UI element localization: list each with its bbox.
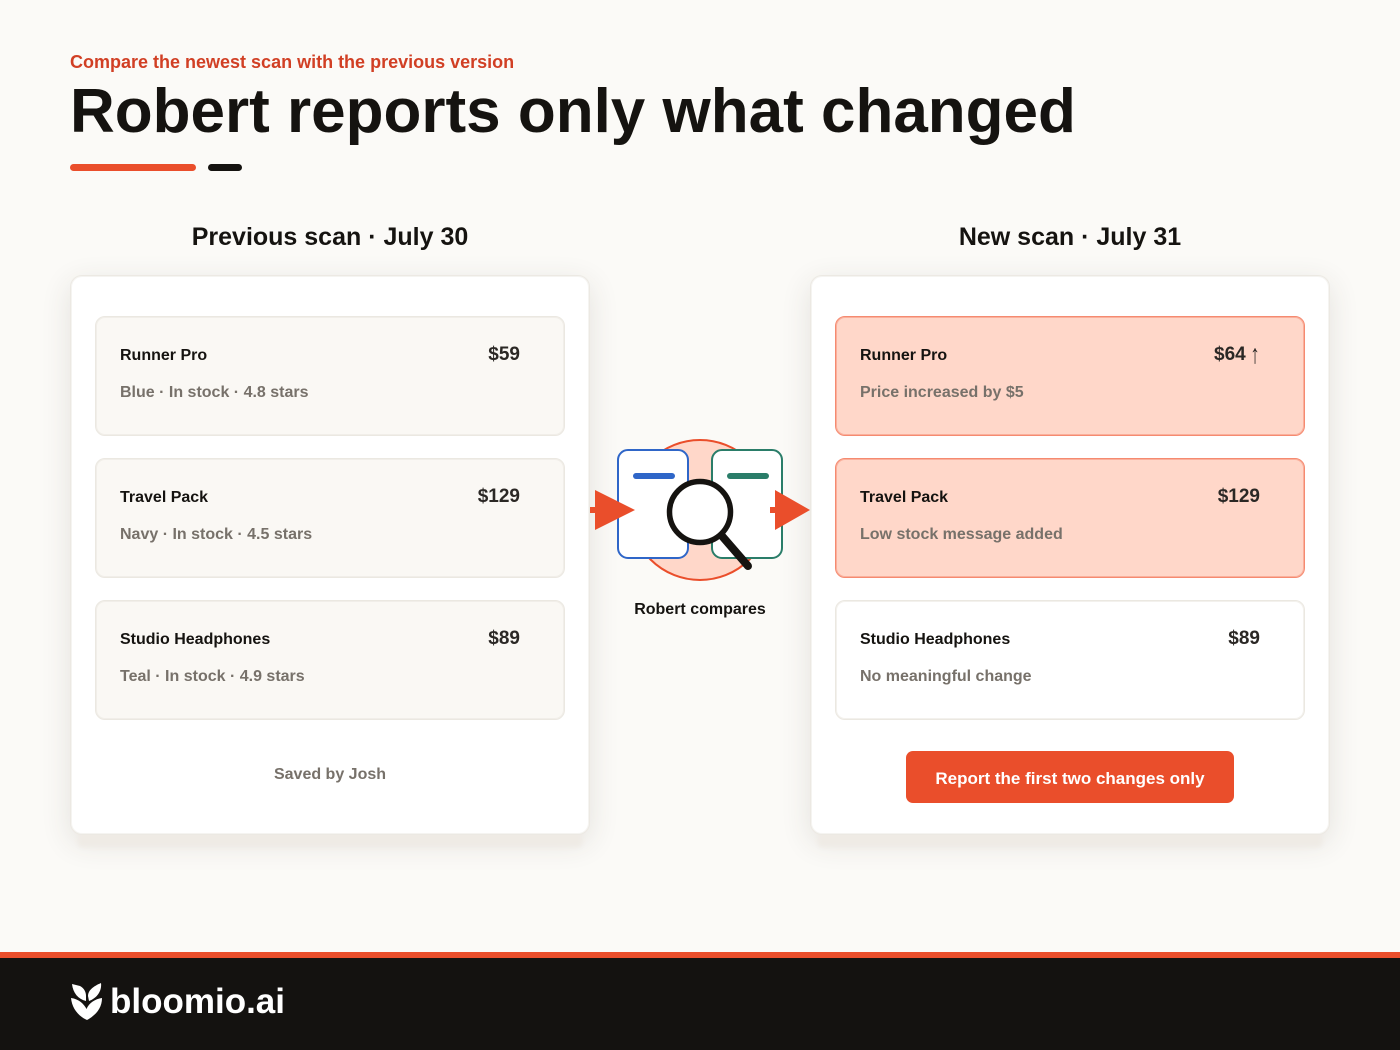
row: Travel Pack previous: Navy · In stock · 4.5 stars <box>120 526 312 543</box>
row: Studio Headphones previous: Teal · In stock · 4.9 stars <box>120 668 305 685</box>
row: Travel Pack changed: Travel Pack <box>860 489 948 506</box>
row: Travel Pack changed: Low stock message added <box>860 526 1063 543</box>
row: Runner Pro changed: Price increased by $5 <box>860 384 1024 401</box>
title accent: orange bar <box>70 164 196 171</box>
icon: previous document <box>618 450 688 558</box>
row: Studio Headphones unchanged: Studio Headphones <box>860 631 1010 648</box>
panel: new scan <box>810 275 1330 835</box>
row: Runner Pro changed: Runner Pro <box>860 347 947 364</box>
icon: magnifying glass <box>670 482 748 566</box>
row: Runner Pro previous: Runner Pro <box>120 347 207 364</box>
row: Runner Pro changed: $64 <box>1214 344 1246 365</box>
button: report changes <box>906 751 1234 803</box>
row: Studio Headphones unchanged: $89 <box>1228 628 1260 649</box>
heading: previous scan: Previous scan · July 30 <box>192 223 468 251</box>
compare label: Robert compares <box>634 601 766 618</box>
icon: new document <box>712 450 782 558</box>
heading: new scan: New scan · July 31 <box>959 223 1181 251</box>
row: Runner Pro previous: $59 <box>488 344 520 365</box>
footer band <box>0 952 1400 1050</box>
row: Studio Headphones previous: Studio Headphones <box>120 631 270 648</box>
arrow: out of compare <box>770 490 810 530</box>
eyebrow: Compare the newest scan with the previous version <box>70 52 514 72</box>
comparison illustration <box>590 439 810 581</box>
row: Studio Headphones unchanged <box>835 600 1305 720</box>
icon: background circle <box>630 440 770 580</box>
saved note: Saved by Josh <box>274 766 386 783</box>
row: Travel Pack changed: $129 <box>1218 486 1260 507</box>
row: Studio Headphones previous: $89 <box>488 628 520 649</box>
row: Runner Pro changed: ↑ <box>1250 339 1260 369</box>
row: Travel Pack previous: Travel Pack <box>120 489 208 506</box>
title accent: black bar <box>208 164 242 171</box>
row: Travel Pack previous <box>95 458 565 578</box>
row: Runner Pro previous <box>95 316 565 436</box>
panel: previous scan <box>70 275 590 835</box>
arrow: into compare <box>590 490 635 530</box>
row: Studio Headphones unchanged: No meaningful change <box>860 668 1032 685</box>
logo wordmark: bloomio.ai <box>110 982 285 1021</box>
row: Travel Pack previous: $129 <box>478 486 520 507</box>
row: Travel Pack changed <box>835 458 1305 578</box>
row: Runner Pro previous: Blue · In stock · 4.8 stars <box>120 384 309 401</box>
row: Studio Headphones previous <box>95 600 565 720</box>
title: Robert reports only what changed <box>70 77 1076 146</box>
icon: bloomio leaf <box>71 983 102 1020</box>
button: report changes: Report the first two changes only <box>935 769 1205 788</box>
row: Runner Pro changed <box>835 316 1305 436</box>
